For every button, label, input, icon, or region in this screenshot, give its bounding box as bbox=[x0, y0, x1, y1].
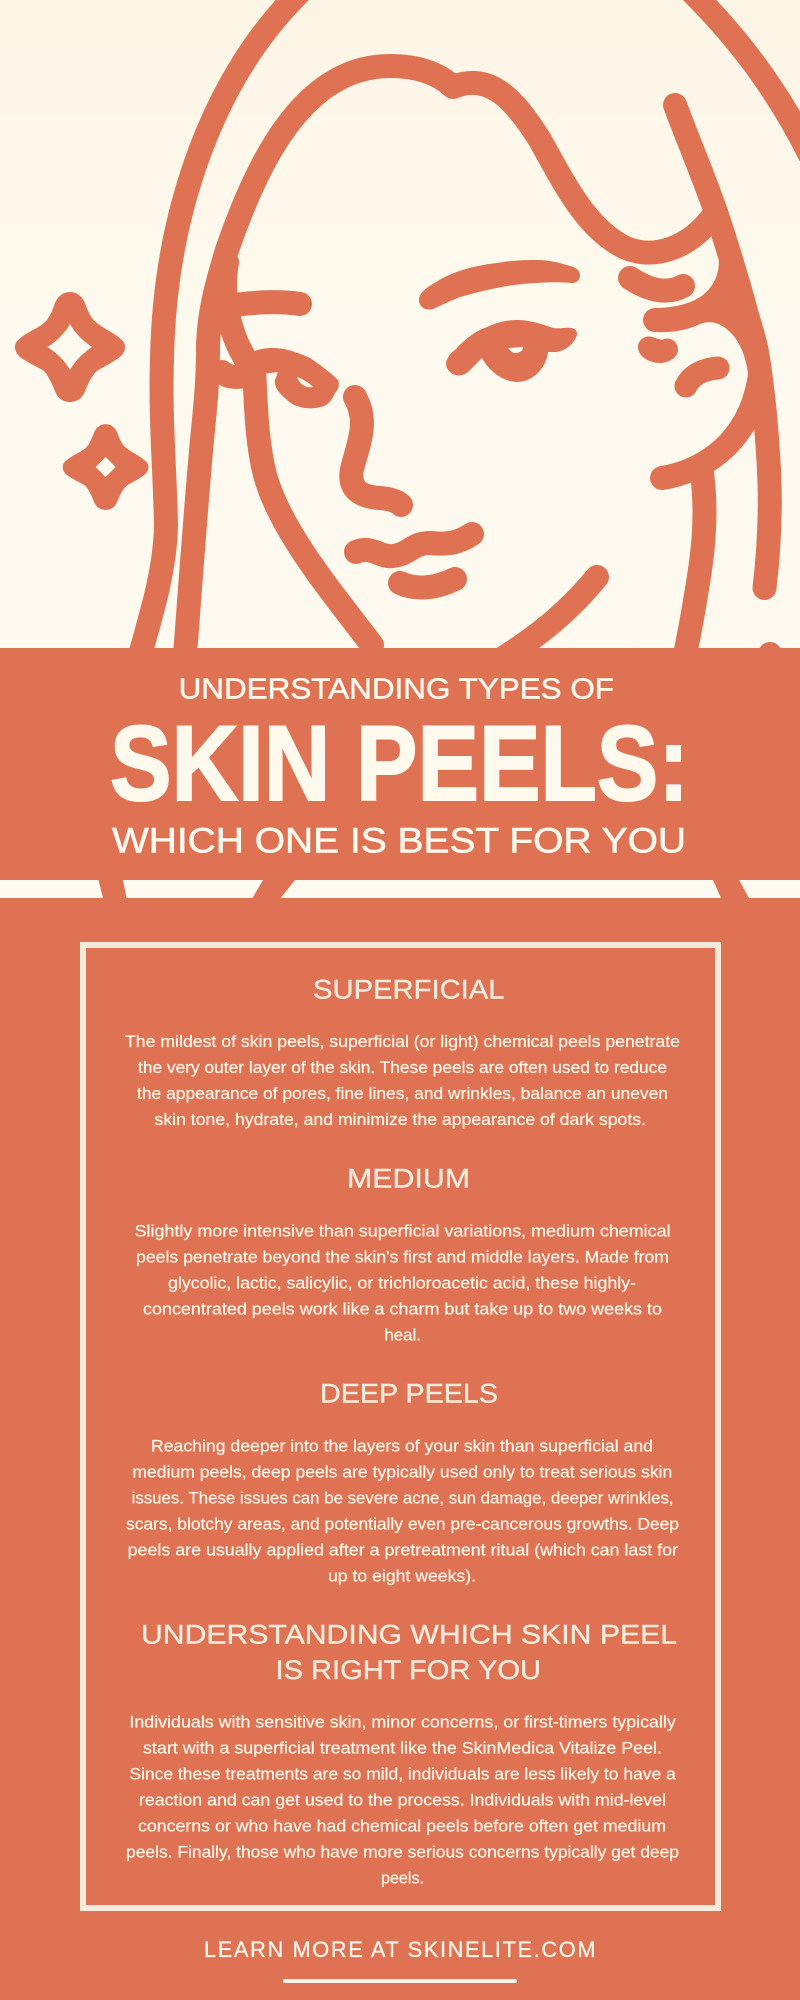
right eye bbox=[446, 320, 577, 382]
heading: understanding: IS RIGHT FOR YOU bbox=[276, 1655, 541, 1685]
heading: understanding: UNDERSTANDING WHICH SKIN PEEL bbox=[141, 1619, 677, 1649]
left brow bbox=[225, 302, 300, 306]
body: superficial: skin tone, hydrate, and minimize the appearance of dark spots. bbox=[154, 1111, 646, 1129]
illustration background bbox=[0, 0, 800, 898]
neck right bbox=[685, 473, 704, 655]
strip below band bbox=[98, 880, 749, 898]
hair stub bbox=[758, 654, 782, 700]
title line 3: WHICH ONE IS BEST FOR YOU bbox=[112, 822, 686, 861]
body: understanding: concerns or who have had chemical peels before often get medium bbox=[138, 1817, 666, 1835]
body: superficial: the appearance of pores, fine lines, and wrinkles, balance an uneven bbox=[137, 1085, 668, 1103]
mark C bbox=[686, 368, 718, 386]
section: deep peels bbox=[126, 1379, 679, 1586]
body: medium: glycolic, lactic, salicylic, or trichloroacetic acid, these highly- bbox=[168, 1275, 636, 1293]
head and fringe outline bbox=[185, 66, 716, 655]
body: understanding: Since these treatments are so mild, individuals are less likely to have a bbox=[129, 1765, 677, 1783]
section: medium bbox=[135, 1164, 671, 1345]
ear fill bbox=[643, 238, 762, 373]
outer hair left bbox=[140, 0, 300, 655]
chin bbox=[500, 577, 597, 660]
body: understanding: reaction and can get used to the process. Individuals with mid-level bbox=[139, 1791, 666, 1809]
upper lip bbox=[356, 534, 472, 556]
body: deep peels: up to eight weeks). bbox=[328, 1568, 476, 1586]
sparkle large bbox=[15, 292, 125, 402]
footer underline bbox=[283, 1979, 517, 1983]
outer hair right bbox=[690, 0, 800, 155]
content frame bbox=[83, 945, 718, 1908]
body: deep peels: Reaching deeper into the layers of your skin than superficial and bbox=[151, 1438, 653, 1456]
facial highlights bbox=[96, 347, 523, 477]
right brow bbox=[419, 260, 580, 310]
jaw left bbox=[254, 370, 372, 645]
body: medium: concentrated peels work like a charm but take up to two weeks to bbox=[143, 1301, 662, 1319]
section: superficial bbox=[125, 975, 680, 1129]
mark A bbox=[630, 278, 683, 291]
body: superficial bbox=[125, 1033, 680, 1129]
body: deep peels bbox=[126, 1438, 679, 1586]
heading: medium: MEDIUM bbox=[347, 1164, 470, 1194]
inner hair left bbox=[225, 262, 253, 370]
body: understanding: peels. bbox=[381, 1869, 424, 1887]
footer call to action: LEARN MORE AT SKINELITE.COM bbox=[204, 1937, 596, 1962]
body: deep peels: issues. These issues can be severe acne, sun damage, deeper wrinkles, bbox=[132, 1490, 674, 1508]
body: deep peels: peels are usually applied after a pretreatment ritual (which can last for bbox=[128, 1542, 679, 1560]
mark B bbox=[638, 336, 678, 363]
lower section background bbox=[0, 898, 800, 2000]
title line 1: UNDERSTANDING TYPES OF bbox=[179, 674, 614, 706]
body: understanding: start with a superficial treatment like the SkinMedica Vitalize Peel. bbox=[143, 1739, 662, 1757]
body: deep peels: scars, blotchy areas, and potentially even pre-cancerous growths. Deep bbox=[126, 1516, 679, 1534]
ear curve bbox=[662, 375, 760, 478]
heading: deep peels: DEEP PEELS bbox=[320, 1379, 498, 1409]
body: understanding bbox=[126, 1713, 679, 1887]
body: medium bbox=[135, 1223, 671, 1345]
body: superficial: the very outer layer of the skin. These peels are often used to reduce bbox=[138, 1059, 667, 1077]
lower lip bbox=[400, 579, 455, 588]
body: medium: peels penetrate beyond the skin's first and middle layers. Made from bbox=[136, 1249, 669, 1267]
title band bbox=[0, 648, 800, 880]
body: superficial: The mildest of skin peels, superficial (or light) chemical peels penetrate bbox=[125, 1033, 680, 1051]
body: medium: Slightly more intensive than superficial variations, medium chemical bbox=[135, 1223, 671, 1241]
nose bbox=[351, 397, 401, 505]
body: understanding: Individuals with sensitive skin, minor concerns, or first-timers typically bbox=[129, 1713, 677, 1731]
title bbox=[110, 674, 689, 861]
long hair strand right bbox=[675, 105, 770, 588]
left ear stub bbox=[222, 372, 250, 377]
illustration: woman's face line art bbox=[140, 0, 800, 700]
heading: understanding bbox=[141, 1619, 677, 1685]
heading: superficial: SUPERFICIAL bbox=[313, 975, 504, 1005]
section: understanding bbox=[126, 1619, 679, 1887]
body: understanding: peels. Finally, those who have more serious concerns typically get deep bbox=[126, 1843, 679, 1861]
body: deep peels: medium peels, deep peels are typically used only to treat serious skin bbox=[132, 1464, 672, 1482]
left eye bbox=[250, 348, 339, 408]
sparkle small bbox=[63, 424, 149, 510]
body: medium: heal. bbox=[384, 1327, 421, 1345]
title line 2: SKIN PEELS: bbox=[110, 703, 689, 823]
